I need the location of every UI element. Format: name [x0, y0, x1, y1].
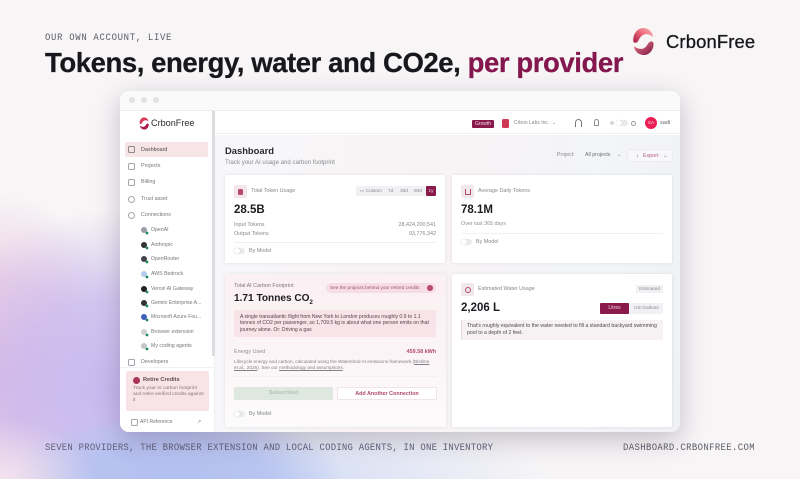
retire credits callout	[126, 371, 209, 411]
app window	[120, 91, 680, 432]
provider: My coding agents	[141, 343, 192, 350]
sidebar logo: CrbonFree	[151, 118, 194, 128]
nav item: Trust asset	[128, 196, 168, 203]
provider: Anthropic: Anthropic	[151, 242, 173, 248]
water total: 2,206 L	[461, 302, 500, 314]
flight comparison note	[234, 310, 436, 337]
provider: Browser extension	[141, 329, 194, 336]
icon: headset	[575, 119, 582, 127]
date range selector: 1y	[429, 188, 433, 193]
panel: total AI carbon footprint	[225, 274, 446, 427]
output tokens row: 93,776,342	[409, 231, 436, 237]
sidebar scrollbar	[212, 111, 214, 356]
provider: Microsoft Azure: Microsoft Azure Fou...	[151, 314, 201, 320]
provider: Browser extension: Browser extension	[151, 329, 194, 335]
subscribed button: Subscribed	[269, 390, 298, 396]
provider: Anthropic	[141, 242, 173, 250]
brand name: CrbonFree	[666, 31, 755, 52]
panel: main content	[215, 135, 680, 432]
flight comparison note: A single transatlantic flight from New York to London produces roughly 0.9 to 1.1	[240, 314, 421, 320]
brand logo	[633, 28, 755, 55]
export button: ↓	[636, 153, 639, 159]
footer url: DASHBOARD.CRBONFREE.COM	[623, 442, 755, 454]
unit selector: US Gallons	[634, 306, 659, 310]
date range selector: ▭ Custom	[360, 188, 382, 193]
input tokens row: 28,424,200,541	[399, 222, 436, 228]
input tokens row: Input Tokens	[234, 222, 264, 228]
retired credits pill	[326, 283, 436, 293]
provider: Gemini Enterprise: Gemini Enterprise A...	[151, 300, 201, 306]
panel: average daily tokens	[452, 175, 672, 263]
date range selector: 7d	[388, 188, 393, 193]
token total: 28.5B	[234, 204, 265, 216]
carbon total: 1.71 Tonnes CO2	[234, 293, 313, 306]
provider: Microsoft Azure	[141, 314, 201, 322]
provider: Vercel AI Gateway: Vercel AI Gateway	[151, 286, 193, 292]
callout text	[133, 386, 204, 403]
nav highlight: Dashboard	[125, 142, 208, 157]
icon: water drop	[461, 283, 474, 296]
api reference link: API Reference	[140, 418, 173, 424]
nav item: Connections: Connections	[141, 212, 171, 218]
energy used row: 459.58 kWh	[407, 349, 436, 355]
provider: OpenRouter: OpenRouter	[151, 256, 179, 262]
nav item: Billing: Billing	[141, 179, 155, 185]
subscribed button	[234, 387, 333, 400]
callout title: Retire Credits	[143, 377, 180, 383]
provider: Vercel AI Gateway	[141, 286, 194, 294]
provider: OpenRouter	[141, 256, 180, 264]
nav highlight: Dashboard: Dashboard	[141, 146, 167, 152]
export button: Export	[643, 153, 659, 159]
date range selector: 90d	[414, 188, 422, 193]
project filter: Project:	[557, 152, 575, 158]
daily average value: 78.1M	[461, 204, 493, 216]
nav item: Trust asset: Trust asset	[141, 196, 167, 202]
estimated tag: Estimated	[639, 286, 660, 291]
organisation selector: ⌄	[552, 120, 556, 126]
icon: logo mark	[633, 28, 654, 55]
output tokens row: Output Tokens	[234, 231, 269, 237]
theme toggle	[610, 120, 636, 126]
project filter: ⌄	[617, 152, 621, 158]
user avatar: SA	[648, 120, 654, 124]
organisation selector	[502, 119, 556, 128]
estimated tag	[636, 285, 663, 293]
project filter: All projects	[585, 152, 610, 158]
api reference link	[131, 418, 201, 426]
provider: AWS Bedrock	[141, 271, 183, 278]
provider: AWS Bedrock: AWS Bedrock	[151, 271, 183, 277]
water comparison note	[461, 320, 663, 340]
plan badge: Growth	[475, 120, 491, 126]
project filter	[557, 152, 621, 158]
by model toggle: By Model	[249, 248, 271, 254]
provider: OpenAI	[141, 227, 169, 234]
nav item: Developers	[128, 359, 168, 366]
water comparison note: That's roughly equivalent to the water needed to fill a standard backyard swimming	[467, 323, 657, 329]
card label: Average Daily Tokens	[478, 188, 530, 194]
methodology note	[234, 359, 430, 371]
provider: Gemini Enterprise	[141, 300, 201, 308]
export button: ⌄	[663, 153, 668, 159]
provider: OpenAI: OpenAI	[151, 227, 169, 233]
icon: database	[234, 185, 247, 198]
date range selector	[356, 186, 436, 196]
organisation selector: Crbon Labs Inc.	[514, 120, 549, 126]
panel: total token usage	[225, 175, 445, 263]
footer caption: SEVEN PROVIDERS, THE BROWSER EXTENSION AND LOCAL CODING AGENTS, IN ONE INVENTORY	[45, 442, 493, 454]
page heading: Dashboard	[225, 145, 274, 156]
period note: Over last 365 days	[461, 221, 506, 227]
callout text: and retire verified credits against	[133, 392, 204, 397]
plan badge	[472, 120, 494, 128]
by model toggle: By Model	[476, 239, 498, 245]
user name: sadi	[660, 120, 670, 126]
flight comparison note: journey alone. Or: Driving a gas	[240, 327, 312, 333]
export button	[627, 149, 673, 162]
add connection button	[337, 387, 437, 400]
card label: Total AI Carbon Footprint	[234, 283, 294, 289]
provider: My coding agents: My coding agents	[151, 343, 192, 349]
retired credits pill: See the projects behind your retired credits	[330, 285, 419, 290]
energy used row	[234, 349, 436, 355]
callout text: it	[133, 398, 135, 403]
energy used row: Energy Used	[234, 349, 265, 355]
eyebrow label: OUR OWN ACCOUNT, LIVE	[45, 32, 172, 44]
callout text: Track your AI carbon footprint	[133, 386, 197, 391]
unit selector: Litres	[608, 305, 621, 311]
panel: top bar	[215, 111, 680, 134]
add connection button: Add Another Connection	[355, 391, 419, 397]
unit selector	[600, 303, 663, 314]
date range selector: 30d	[400, 188, 408, 193]
nav item: Projects: Projects	[141, 162, 160, 168]
card label: Estimated Water Usage	[478, 286, 535, 292]
page subheading: Track your AI usage and carbon footprint	[225, 158, 335, 166]
icon: globe	[133, 377, 140, 384]
nav item: Projects	[128, 162, 160, 170]
card label: Total Token Usage	[251, 188, 295, 194]
input tokens row	[234, 222, 436, 228]
user avatar	[645, 116, 657, 128]
water comparison note: pool to a depth of 2 feet.	[467, 330, 523, 336]
by model toggle	[460, 238, 498, 246]
sidebar logo	[140, 117, 194, 130]
nav item: Billing	[128, 179, 155, 186]
icon: bell	[594, 119, 599, 126]
icon: bar chart	[461, 185, 474, 198]
api reference link: ↗	[197, 418, 201, 424]
nav item: Developers: Developers	[141, 359, 168, 365]
flight comparison note: tonnes of CO2 per passenger, so 1,709.5 kg is about what one person emits on that	[240, 320, 429, 326]
by model toggle	[234, 410, 272, 418]
methodology note: Lifecycle energy and carbon, calculated using the Watershed AI emissions framework (Bistline	[234, 359, 429, 364]
by model toggle: By Model	[249, 411, 271, 417]
output tokens row	[234, 231, 436, 237]
panel: sidebar	[120, 111, 215, 432]
nav item: Connections	[128, 212, 171, 219]
window title bar	[120, 91, 680, 111]
methodology note: et al., 2026). See our methodology and assumptions.	[234, 365, 344, 370]
title: Tokens, energy, water and CO2e, per provider	[45, 47, 623, 78]
panel: estimated water usage	[452, 274, 672, 427]
by model toggle	[234, 248, 272, 254]
